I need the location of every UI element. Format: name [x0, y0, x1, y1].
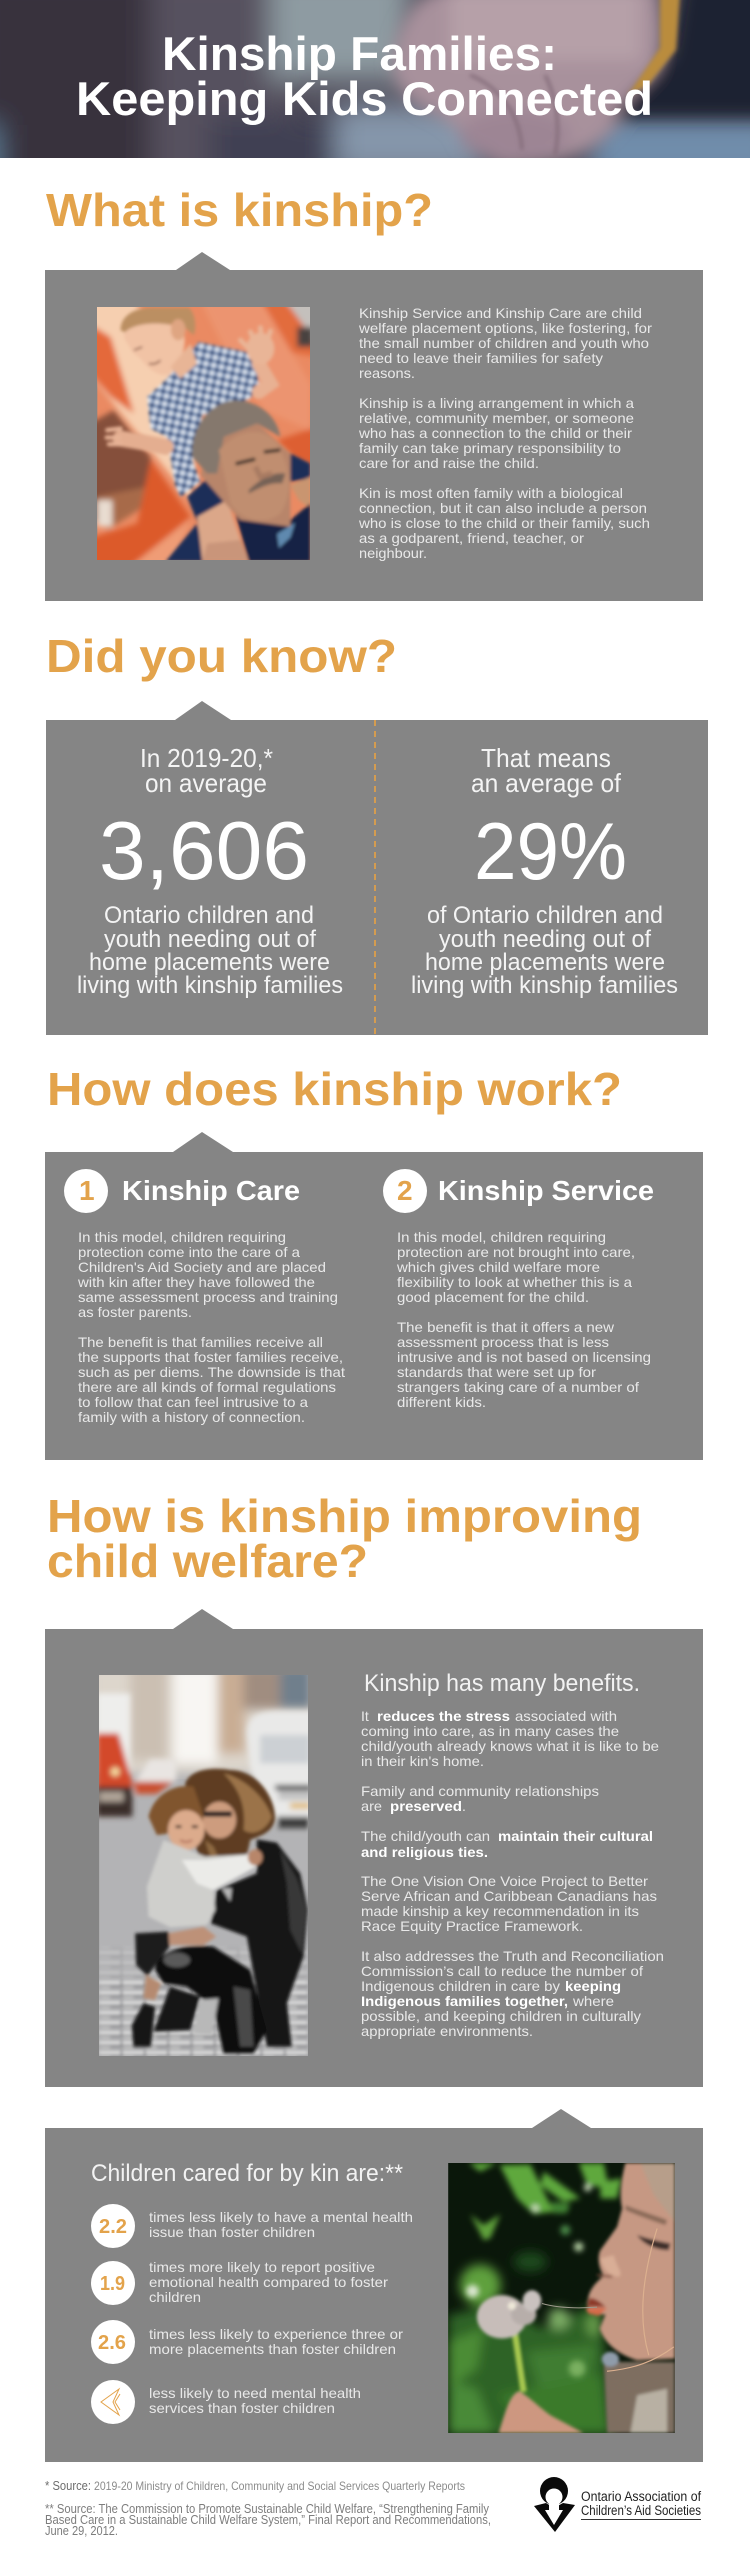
- text block: what is kinship: reasons.: [359, 365, 415, 381]
- column: kinship service: different kids.: [397, 1394, 486, 1410]
- stat row: 2.2: times less likely to have a mental health: [149, 2209, 413, 2225]
- stat: 3,606 children: living with kinship families: [77, 972, 343, 999]
- text block: benefits: Indigenous families together,: [361, 1993, 568, 2009]
- footnote: sources: Based Care in a Sustainable Child Welfare System,” Final Report and Recommendations,: [45, 2512, 491, 2527]
- column: kinship care: as foster parents.: [78, 1304, 192, 1320]
- text block: what is kinship: neighbour.: [359, 545, 427, 561]
- heading: what is kinship: What is kinship?: [46, 184, 433, 236]
- text block: what is kinship: connection, but it can also include a person: [359, 500, 647, 516]
- text block: benefits: It also addresses the Truth and Reconciliation: [361, 1948, 664, 1964]
- text block: benefits: preserved: [390, 1798, 462, 1814]
- stat row: 2.6: more placements than foster children: [149, 2341, 396, 2357]
- text block: what is kinship: Kin is most often family with a biological: [359, 485, 623, 501]
- footnote: sources: [45, 2478, 491, 2538]
- column: kinship service: flexibility to look at whether this is a: [397, 1274, 632, 1290]
- stat row: 2.2: issue than foster children: [149, 2224, 315, 2240]
- heading: how is kinship improving child welfare: [47, 1490, 642, 1587]
- column: kinship care: such as per diems. The downside is that: [78, 1364, 345, 1380]
- footnote: sources: 2019-20 Ministry of Children, Community and Social Services Quarterly Reports: [94, 2479, 465, 2493]
- column: kinship service: good placement for the child.: [397, 1289, 589, 1305]
- text block: what is kinship: who is close to the child or their family, such: [358, 515, 650, 531]
- stat: 29 percent: youth needing out of: [439, 926, 651, 953]
- stat: 3,606 children: [77, 743, 343, 999]
- heading: how is kinship improving child welfare: child welfare?: [47, 1535, 368, 1587]
- title: [76, 27, 653, 125]
- column: kinship care: Kinship Care: [122, 1175, 300, 1206]
- banner photo: baby hand: [0, 0, 750, 158]
- photo: girl blowing dandelion: [448, 2163, 675, 2433]
- column: kinship service: protection are not brought into care,: [397, 1244, 635, 1260]
- title: Kinship Families:: [162, 27, 557, 80]
- column: kinship service: In this model, children requiring: [397, 1229, 606, 1245]
- text block: what is kinship: welfare placement options, like fostering, for: [358, 320, 652, 336]
- text block: what is kinship: Kinship is a living arrangement in which a: [359, 395, 634, 411]
- text block: benefits: appropriate environments.: [361, 2023, 533, 2039]
- text block: what is kinship: care for and raise the child.: [359, 455, 539, 471]
- text block: benefits: maintain their cultural: [498, 1828, 653, 1844]
- text block: benefits: Family and community relationships: [361, 1783, 599, 1799]
- stat row: 2.6: 2.6: [98, 2332, 126, 2354]
- text block: benefits: made kinship a key recommendation in its: [361, 1903, 639, 1919]
- stat: 3,606 children: 3,606: [99, 804, 309, 897]
- text block: benefits: [361, 1670, 664, 2039]
- stat: 29 percent: That means: [481, 743, 611, 773]
- text block: what is kinship: the small number of children and youth who: [359, 335, 649, 351]
- panel heading: Children cared for by kin are:**: [91, 2160, 403, 2187]
- logo: Ontario Association of Children's Aid Societies: Ontario Association of: [581, 2489, 701, 2504]
- column: kinship service: assessment process that is less: [397, 1334, 609, 1350]
- text block: benefits: Race Equity Practice Framework.: [361, 1918, 583, 1934]
- text block: benefits: Indigenous children in care by: [361, 1978, 560, 1994]
- stat: 3,606 children: youth needing out of: [104, 926, 316, 953]
- stat: 3,606 children: on average: [145, 768, 267, 798]
- text block: what is kinship: family can take primary responsibility to: [359, 440, 621, 456]
- panel: what is kinship: [45, 252, 703, 601]
- column: kinship care: there are all kinds of formal regulations: [78, 1379, 336, 1395]
- column: kinship service: The benefit is that it offers a new: [397, 1319, 615, 1335]
- column: kinship care: Children's Aid Society and are placed: [78, 1259, 326, 1275]
- column: kinship care: [64, 1169, 345, 1425]
- panel: children cared for by kin: [45, 2109, 703, 2462]
- footnote: sources: * Source:: [45, 2478, 91, 2493]
- text block: benefits: possible, and keeping children in culturally: [361, 2008, 641, 2024]
- stat: 29 percent: living with kinship families: [411, 972, 678, 999]
- column: kinship service: standards that were set up for: [397, 1364, 596, 1380]
- stat: 29 percent: home placements were: [425, 949, 665, 976]
- stat row: 2.6: [91, 2320, 403, 2364]
- column: kinship service: which gives child welfare more: [396, 1259, 600, 1275]
- stat row: 1.9: children: [149, 2289, 201, 2305]
- stat row: 2.2: 2.2: [99, 2216, 127, 2238]
- heading: how is kinship improving child welfare: How is kinship improving: [47, 1490, 642, 1542]
- column: kinship service: [383, 1169, 654, 1410]
- column: kinship service: strangers taking care of a number of: [397, 1379, 639, 1395]
- column: kinship service: 2: [397, 1175, 413, 1206]
- column: kinship care: same assessment process and training: [78, 1289, 338, 1305]
- heading: how does kinship work: How does kinship work?: [47, 1063, 622, 1115]
- title: Keeping Kids Connected: [76, 72, 653, 125]
- stat: 29 percent: [411, 743, 678, 999]
- column: kinship care: The benefit is that families receive all: [78, 1334, 323, 1350]
- column: kinship care: In this model, children requiring: [78, 1229, 286, 1245]
- text block: benefits: The One Vision One Voice Project to Better: [361, 1873, 648, 1889]
- column: kinship care: 1: [79, 1175, 95, 1206]
- stat: 29 percent: of Ontario children and: [427, 902, 663, 929]
- column: kinship care: the supports that foster families receive,: [78, 1349, 343, 1365]
- stat row: 1.9: [91, 2259, 388, 2305]
- column: kinship care: to follow that can feel intrusive to a: [78, 1394, 308, 1410]
- text block: benefits: are: [361, 1798, 382, 1814]
- text block: benefits: keeping: [565, 1978, 621, 1994]
- footnote: sources: June 29, 2012.: [45, 2523, 118, 2538]
- stat row: 1.9: times more likely to report positive: [149, 2259, 375, 2275]
- stat: 29 percent: an average of: [471, 768, 622, 798]
- stat: 3,606 children: In 2019-20,*: [140, 743, 273, 773]
- text block: benefits: It: [361, 1708, 369, 1724]
- stat row: 1.9: emotional health compared to foster: [149, 2274, 388, 2290]
- heading: did you know: Did you know?: [46, 630, 397, 682]
- stat row: less likely chevron: less likely to need mental health: [149, 2385, 361, 2401]
- stat row: less likely chevron: [91, 2380, 361, 2424]
- text block: benefits: Serve African and Caribbean Canadians has: [361, 1888, 657, 1904]
- text block: benefits: in their kin's home.: [361, 1753, 484, 1769]
- text block: benefits: reduces the stress: [377, 1708, 510, 1724]
- column: kinship service: Kinship Service: [438, 1175, 654, 1206]
- panel: how does kinship work: [45, 1132, 703, 1460]
- column: kinship care: with kin after they have followed the: [77, 1274, 315, 1290]
- text block: benefits: and religious ties.: [361, 1844, 488, 1860]
- stat row: less likely chevron: services than foster children: [149, 2400, 335, 2416]
- logo: Ontario Association of Children's Aid Societies: [534, 2477, 701, 2532]
- text block: benefits: .: [462, 1798, 466, 1814]
- text block: benefits: The child/youth can: [361, 1828, 490, 1844]
- panel: did you know: [46, 701, 708, 1035]
- text block: benefits: where: [572, 1993, 614, 2009]
- stat row: 1.9: 1.9: [100, 2273, 125, 2295]
- footnote: sources: ** Source: The Commission to Promote Sustainable Child Welfare, “Strengthening Family: [45, 2501, 489, 2516]
- text block: benefits: Kinship has many benefits.: [364, 1670, 640, 1697]
- text block: benefits: Commission’s call to reduce the number of: [361, 1963, 643, 1979]
- text block: what is kinship: need to leave their families for safety: [359, 350, 603, 366]
- column: kinship service: intrusive and is not based on licensing: [397, 1349, 651, 1365]
- stat: 3,606 children: home placements were: [89, 949, 330, 976]
- photo: boy on grandfather's shoulders: [97, 307, 310, 560]
- panel: kinship benefits: [45, 1609, 703, 2087]
- column: kinship care: family with a history of connection.: [78, 1409, 305, 1425]
- logo: Ontario Association of Children's Aid Societies: Children’s Aid Societies: [581, 2503, 701, 2518]
- text block: what is kinship: [358, 305, 652, 561]
- column: kinship care: protection come into the care of a: [78, 1244, 300, 1260]
- stat: 3,606 children: Ontario children and: [104, 902, 314, 929]
- text block: what is kinship: as a godparent, friend, teacher, or: [359, 530, 584, 546]
- photo: mother and child on street: [99, 1675, 308, 2056]
- stat row: 2.6: times less likely to experience three or: [149, 2326, 403, 2342]
- text block: what is kinship: relative, community member, or someone: [359, 410, 634, 426]
- text block: benefits: coming into care, as in many cases the: [361, 1723, 619, 1739]
- text block: benefits: child/youth already knows what it is like to be: [361, 1738, 659, 1754]
- stat: 29 percent: 29%: [474, 807, 627, 897]
- text block: what is kinship: who has a connection to the child or their: [358, 425, 632, 441]
- text block: what is kinship: Kinship Service and Kinship Care are child: [359, 305, 642, 321]
- stat row: 2.2: [91, 2204, 413, 2248]
- text block: benefits: associated with: [515, 1708, 617, 1724]
